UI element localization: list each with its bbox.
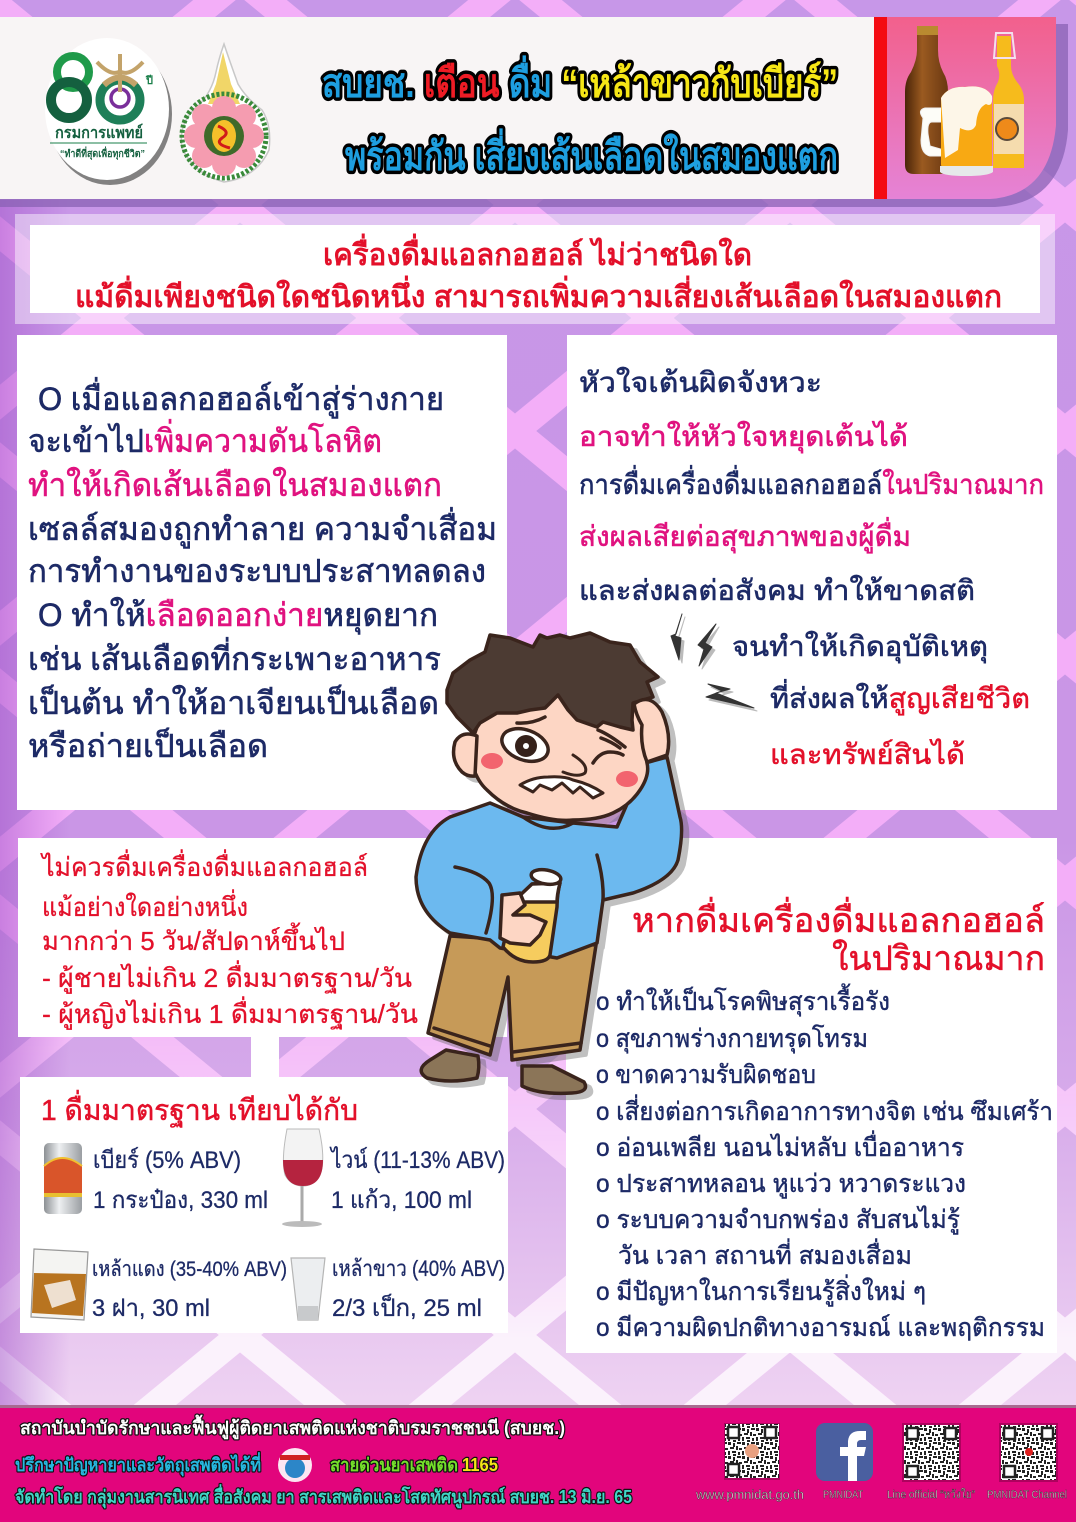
illustration: man with headache holding a bottle [416,633,682,1093]
text: wine [329,1146,505,1214]
panel: drinking limits: - ผู้หญิงไม่เกิน 1 ดื่มมาตรฐาน/วัน [42,996,418,1030]
panel: effects on body: เช่น เส้นเลือดที่กระเพาะอาหาร [28,637,441,677]
panel: drinking limits: ไม่ควรดื่มเครื่องดื่มแอลกอฮอล์ [40,849,368,882]
panel: effects on body: การทำงานของระบบประสาทลดลง [28,553,486,589]
cheeks [481,753,638,787]
symptom list: o ทำให้เป็นโรคพิษสุราเรื้อรัง [596,983,890,1017]
panel: effects on body [17,335,507,810]
panel: heart and social effects: และส่งผลต่อสังคม ทำให้ขาดสติ [579,574,975,606]
text: wine: 1 แก้ว, 100 ml [331,1187,472,1214]
text: wine: ไวน์ (11-13% ABV) [329,1146,505,1174]
panel: drinking limits: มากกว่า 5 วัน/สัปดาห์ขึ้นไป [42,922,345,956]
logo: 80 years Department of Medical Services: กรมการแพทย์ [55,123,143,142]
header banner [0,17,1068,207]
footer text: hotline: ปรึกษาปัญหายาและวัตถุเสพติดได้ที่ [15,1452,261,1477]
QR code: website [724,1423,780,1480]
panel: effects on body: เซลล์สมองถูกทำลาย ความจำเสื่อม [28,507,497,549]
symptom list: o ขาดความรับผิดชอบ [596,1061,816,1089]
panel: effects of heavy drinking: ในปริมาณมาก [832,939,1045,978]
symptom list: o ระบบความจำบกพร่อง สับสนไม่รู้ [596,1205,960,1235]
panel: drinking limits: แม้อย่างใดอย่างหนึ่ง [42,889,248,922]
panel: effects on body: เป็นต้น ทำให้อาเจียนเป็นเลือด [28,684,439,721]
hair [447,633,658,733]
symptom list: วัน เวลา สถานที่ สมองเสื่อม [618,1238,912,1270]
icon: hotline telephone [278,1448,312,1482]
text: white liquor [332,1256,505,1322]
panel: heart and social effects: อาจทำให้หัวใจหยุดเต้นได้ [579,420,908,454]
panel: heart and social effects: ส่งผลเสียต่อสุขภาพของผู้ดื่ม [579,517,911,554]
panel: heart and social effects [567,335,1057,810]
panel: heart and social effects: ที่ส่งผลให้สูญเสียชีวิต [770,679,1030,716]
hand on head [634,700,669,762]
footer labels: www.pmnidat.go.th [695,1487,804,1502]
icon: whisky glass [31,1249,88,1320]
icon: shot glass [291,1258,325,1320]
sweater sleeve lines [455,817,603,933]
symptom list: o เสี่ยงต่อการเกิดอาการทางจิต เช่น ซึมเศร้า [596,1094,1053,1126]
text: beer: เบียร์ (5% ABV) [93,1146,241,1174]
text: beer: 1 กระป๋อง, 330 ml [93,1187,268,1214]
panel: heart and social effects: และทรัพย์สินได้ [770,739,965,770]
text: whisky: เหล้าแดง (35-40% ABV) [92,1258,287,1281]
hand holding bottle [500,893,546,945]
panel: effects on body: จะเข้าไปเพิ่มความดันโลหิต [28,419,382,459]
QR code: line official [902,1423,961,1482]
icon: wine glass [282,1129,323,1227]
winking eye and eyebrow [593,730,625,763]
symptom list: o ประสาทหลอน หูแว่ว หวาดระแวง [596,1170,966,1199]
text: white liquor: 2/3 เป็ก, 25 ml [332,1293,482,1322]
pink drinks panel [887,17,1056,199]
icon: beer bottles and mug [905,26,1024,176]
logo: 80 years Department of Medical Services: “ทำดีที่สุดเพื่อทุกชีวิต” [60,146,145,160]
title [322,55,838,179]
subtitle banner: เครื่องดื่มแอลกอฮอล์ ไม่ว่าชนิดใด [323,234,752,272]
bottle [503,868,562,962]
footer text: hotline: สายด่วนยาเสพติด [330,1455,458,1475]
icon: facebook [816,1423,873,1481]
text: white liquor: เหล้าขาว (40% ABV) [332,1256,505,1281]
ear [454,734,477,776]
panel: effects on body: ทำให้เกิดเส้นเลือดในสมองแตก [28,467,442,503]
header shadow [0,24,1068,207]
mouth with teeth [520,777,603,798]
sweater [416,757,682,958]
panel: standard drink equivalents [20,1077,508,1333]
logo: 80 years Department of Medical Services [45,38,172,185]
footer [0,1405,1076,1522]
subtitle banner: แม้ดื่มเพียงชนิดใดชนิดหนึ่ง สามารถเพิ่มความเสี่ยงเส้นเลือดในสมองแตก [75,276,1002,314]
logo: 80 years Department of Medical Services: ปี [145,74,153,87]
footer labels: Line official “หวังใย” [887,1488,975,1501]
subtitle banner [15,214,1055,324]
title: พร้อมกัน เสี่ยงเส้นเลือดในสมองแตก [345,128,838,179]
connector between limit and standard-drink panels [251,1036,279,1078]
left eyebrow [517,717,545,723]
panel: heart and social effects: การดื่มเครื่องดื่มแอลกอฮอล์ในปริมาณมาก [579,465,1044,500]
title: สบยช. เตือน ดื่ม “เหล้าขาวกับเบียร์” [322,55,838,106]
footer labels [695,1487,1067,1502]
footer text: hotline: 1165 [462,1455,498,1475]
symptom list: o อ่อนเพลีย นอนไม่หลับ เบื่ออาหาร [596,1130,964,1162]
panel: heart and social effects: หัวใจเต้นผิดจังหวะ [579,366,822,398]
footer text: institute name: สถาบันบำบัดรักษาและฟื้นฟูผู้ติดยาเสพติดแห่งชาติบรมราชชนนี (สบยช.) [20,1414,565,1440]
head [471,667,648,820]
trousers [428,936,596,1060]
trouser hems [434,1028,581,1052]
panel: drinking limits: - ผู้ชายไม่เกิน 2 ดื่มมาตรฐาน/วัน [42,960,412,994]
left eye [497,723,553,767]
text: whisky: 3 ฝา, 30 ml [92,1295,210,1322]
text: beer [93,1146,268,1214]
footer text: hotline [15,1452,498,1477]
panel: effects on body: O เมื่อแอลกอฮอล์เข้าสู่ร่างกาย [38,377,444,419]
icon: beer can [44,1143,82,1214]
panel: effects of heavy drinking [566,838,1057,1353]
panel: effects on body: หรือถ่ายเป็นเลือด [28,727,268,764]
panel: effects on body: O ทำให้เลือดออกง่ายหยุดยาก [38,597,438,635]
text: whisky [92,1258,287,1322]
logo: Thanyarak institute [181,44,270,182]
nose [563,755,586,775]
header white strip [0,17,875,199]
icon: headache lightning marks [671,614,754,708]
symptom list: o มีปัญหาในการเรียนรู้สิ่งใหม่ ๆ [596,1274,926,1307]
panel: standard drink equivalents: 1 ดื่มมาตรฐาน เทียบได้กับ [41,1090,358,1128]
symptom list: o มีความผิดปกติทางอารมณ์ และพฤติกรรม [596,1314,1045,1342]
red divider [874,17,888,199]
symptom list [596,983,1053,1342]
QR code: channel [999,1423,1058,1482]
panel: effects of heavy drinking: หากดื่มเครื่องดื่มแอลกอฮอล์ [632,897,1045,940]
panel: drinking limits [18,838,507,1037]
shoes [421,1050,586,1093]
footer text: credits: จัดทำโดย กลุ่มงานสารนิเทศ สื่อสังคม ยา สารเสพติดและโสตทัศนูปกรณ์ สบยช. 13 มิ.ย. 65 [15,1484,632,1509]
footer labels: PMNIDAT [823,1489,863,1501]
symptom list: o สุขภาพร่างกายทรุดโทรม [596,1024,868,1054]
panel: heart and social effects: จนทำให้เกิดอุบัติเหตุ [732,630,988,664]
